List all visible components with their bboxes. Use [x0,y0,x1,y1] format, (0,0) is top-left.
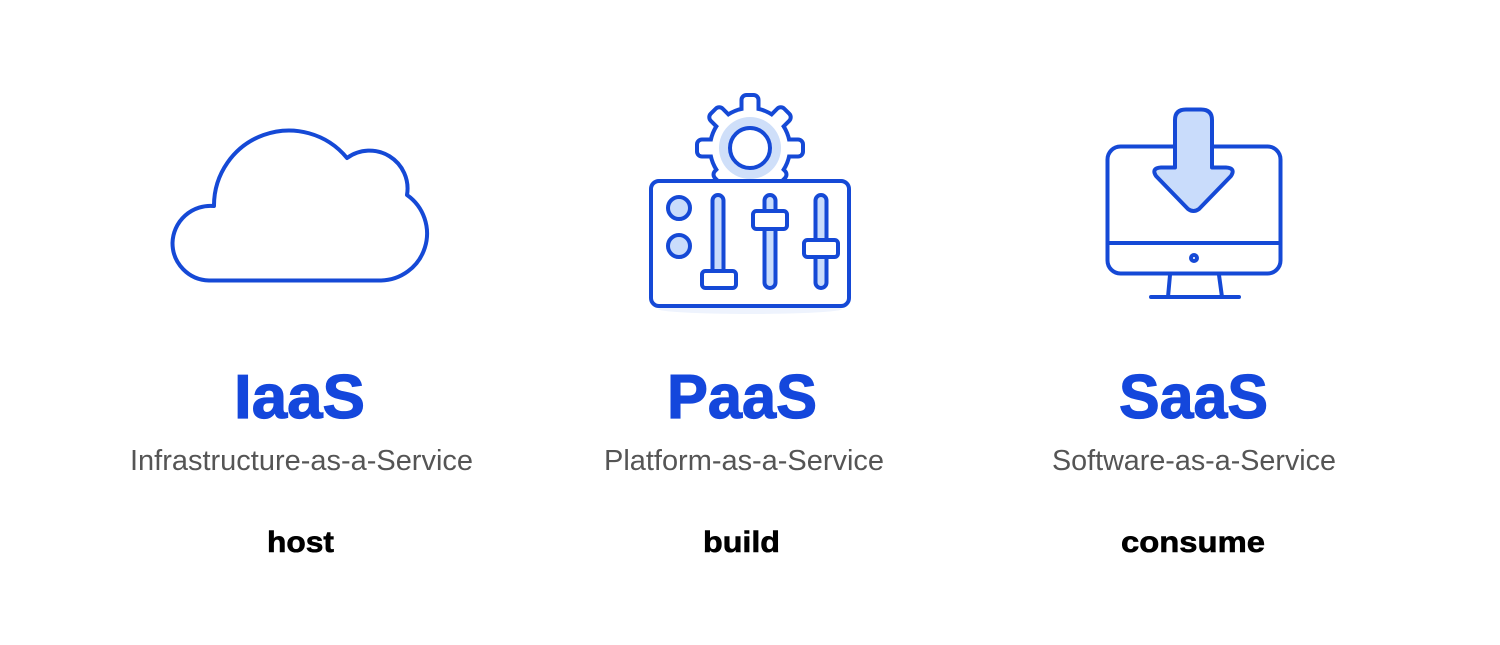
screen divider [1108,241,1280,245]
icon: monitor with download arrow [1108,110,1280,297]
text: build: build [703,526,780,559]
monitor [1108,146,1280,274]
knobs [668,197,690,257]
panel: PaaS [604,97,884,559]
sliders [702,195,838,288]
heading: PaaS: PaaS [667,363,817,432]
icon: gear with control panel [651,97,849,314]
panel shadow [658,304,842,314]
text: consume: consume [1121,526,1265,559]
gear [699,97,801,186]
heading: SaaS: SaaS [1119,363,1268,432]
icon: cloud [172,131,427,280]
control panel [651,181,849,306]
stand [1151,275,1239,297]
panel: IaaS [130,131,473,559]
heading: IaaS: IaaS [234,363,365,432]
power dot [1191,255,1197,261]
text: Software-as-a-Service: Software-as-a-Service [1052,445,1336,477]
text: host: host [267,526,334,559]
text: Platform-as-a-Service: Platform-as-a-Service [604,445,884,477]
panel: SaaS [1052,110,1336,559]
text: Infrastructure-as-a-Service: Infrastructure-as-a-Service [130,445,473,477]
download arrow [1154,110,1233,211]
